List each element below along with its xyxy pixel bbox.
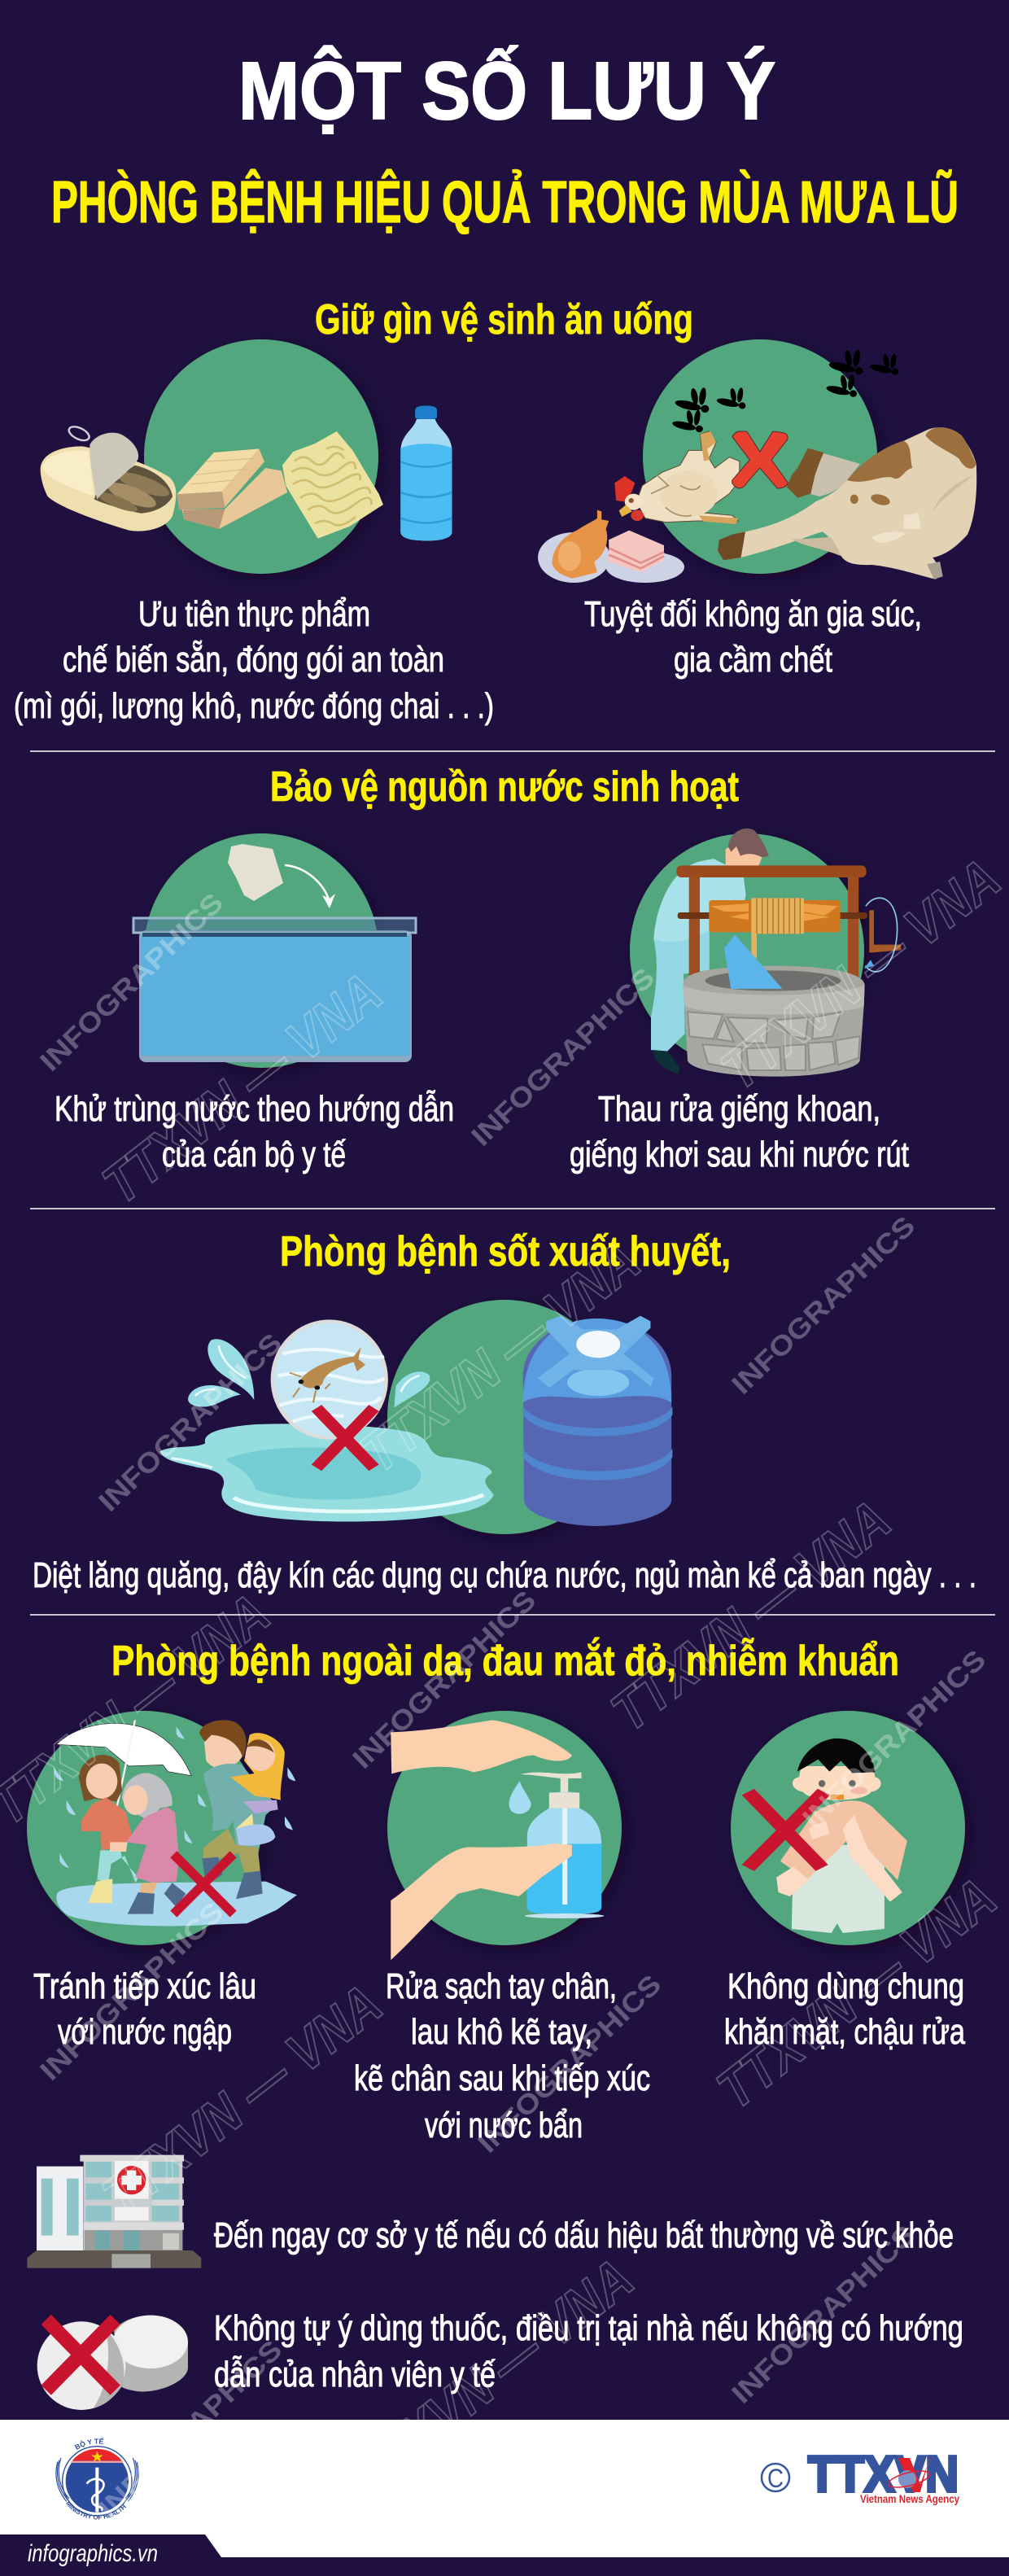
illustration: disinfecting water tank (133, 833, 416, 1068)
text: wash hands: lau khô kẽ tay, (411, 2012, 592, 2052)
logo: TTXVN: C (767, 2464, 784, 2493)
watermarks: TTXVN — VNA (349, 1230, 651, 1485)
text: avoid flood water: với nước ngập (58, 2012, 232, 2052)
watermarks: INFOGRAPHICS (465, 962, 661, 1152)
text: no self medication: dẫn của nhân viên y tế (214, 2355, 496, 2394)
text: disinfect water (55, 1089, 454, 1174)
logo: TTXVN: TTXVN (808, 2447, 959, 2503)
text: avoid flood water (33, 1966, 256, 2052)
illustration: cleaning the well (630, 829, 901, 1077)
section: dengue prevention (33, 1228, 976, 1595)
icon: flies, dead chicken, cow, plate of meat (538, 349, 976, 583)
logo: TTXVN: Vietnam News Agency (860, 2493, 959, 2505)
illustration: hand washing (387, 1711, 622, 1960)
watermarks: TTXVN — VNA (600, 1489, 902, 1743)
text: disinfect water: Khử trùng nước theo hướng dẫn (55, 1089, 454, 1129)
watermarks: INFOGRAPHICS (797, 1644, 992, 1835)
text: dead livestock: Tuyệt đối không ăn gia súc, (584, 594, 922, 634)
icon: tank of water (133, 918, 416, 1062)
text: disinfect water: của cán bộ y tế (162, 1135, 346, 1174)
icon: hospital (27, 2155, 201, 2268)
illustration: dead livestock (538, 339, 976, 583)
illustration: people walking in flood (27, 1711, 297, 1945)
logo: TTXVN (762, 2447, 959, 2505)
text: clean wells (570, 1089, 909, 1174)
footer tab (0, 2534, 221, 2576)
text: dead livestock (584, 594, 922, 680)
icon: canned fish, dry rations, noodles, water bottle (41, 405, 452, 540)
source url: infographics.vn (28, 2540, 158, 2567)
logo: ministry of health: BỘ Y TẾ (75, 2438, 104, 2450)
heading: food hygiene: Giữ gìn vệ sinh ăn uống (315, 296, 693, 343)
watermarks: INFOGRAPHICS (726, 2220, 921, 2410)
watermarks: TTXVN — VNA (91, 1973, 393, 2228)
heading: protect water: Bảo vệ nguồn nước sinh hoạt (270, 763, 739, 811)
illustration: no shared towel (731, 1711, 965, 1945)
text: wash hands: kẽ chân sau khi tiếp xúc (354, 2058, 650, 2098)
watermarks: TTXVN — VNA (91, 961, 393, 1216)
watermarks: INFOGRAPHICS (726, 1210, 921, 1401)
text: packaged food: (mì gói, lương khô, nước đóng chai . . .) (14, 686, 494, 726)
watermarks: TTXVN — VNA (343, 2247, 644, 2502)
watermarks: INFOGRAPHICS (34, 887, 229, 1078)
icon: chemical chunk and arrow (228, 844, 335, 908)
icon: hands under soap dispenser (391, 1720, 604, 1960)
watermarks: INFOGRAPHICS (472, 1969, 667, 2159)
watermarks: INFOGRAPHICS (34, 1896, 229, 2087)
section: skin and eye disease prevention (27, 1637, 965, 2410)
text: no self medication (214, 2308, 963, 2394)
footer (0, 2420, 1009, 2567)
watermarks (0, 847, 1009, 2525)
icon: family in rain with cross (55, 1720, 297, 1926)
watermarks: INFOGRAPHICS (93, 1327, 288, 1518)
section: food hygiene (14, 296, 976, 726)
text: no shared towels (724, 1966, 965, 2052)
illustration: larvae, puddle and water tank (159, 1300, 672, 1534)
watermarks: INFOGRAPHICS (347, 1585, 542, 1775)
text: packaged food: chế biến sẵn, đóng gói an toàn (63, 640, 444, 680)
section: protect water (55, 763, 909, 1174)
title: MỘT SỐ LƯU Ý (238, 46, 775, 137)
text: dead livestock: gia cầm chết (674, 640, 832, 680)
logo: ministry of health (55, 2438, 139, 2520)
text: packaged food: Ưu tiên thực phẩm (138, 594, 370, 634)
logo: ministry of health: MINISTRY OF HEALTH (65, 2500, 126, 2520)
text: clean wells: Thau rửa giếng khoan, (598, 1089, 880, 1129)
icon: man and stone well (651, 829, 901, 1077)
illustration: packaged food (41, 339, 452, 574)
text: packaged food (14, 594, 494, 726)
icon: boy with towel (748, 1738, 907, 1933)
text: avoid flood water: Tránh tiếp xúc lâu (33, 1966, 256, 2006)
text: clean wells: giếng khơi sau khi nước rút (570, 1135, 909, 1174)
icon: pills with cross (37, 2316, 188, 2410)
icon: puddle, drops, magnified larva, covered tank (159, 1316, 672, 1526)
text: wash hands: Rửa sạch tay chân, (386, 1966, 617, 2006)
heading: dengue prevention: Phòng bệnh sốt xuất huyết, (280, 1228, 731, 1275)
text: wash hands (354, 1966, 650, 2145)
watermarks: INFOGRAPHICS (93, 2334, 288, 2525)
text: wash hands: với nước bẩn (425, 2106, 583, 2145)
